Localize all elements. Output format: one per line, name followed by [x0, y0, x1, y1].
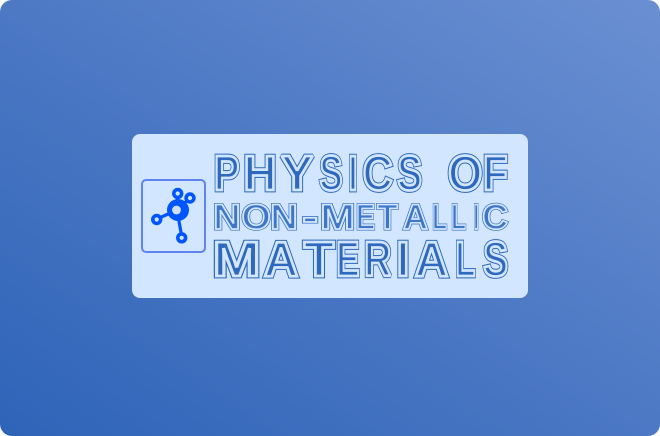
heading: PHYSICS OF: P: [214, 147, 239, 201]
heading: NON-METALLIC: T: [377, 198, 398, 237]
heading: MATERIALS: A: [415, 233, 448, 287]
heading: MATERIALS: M: [213, 233, 260, 287]
heading: MATERIALS: E: [336, 233, 360, 287]
heading: PHYSICS OF: S: [320, 147, 342, 201]
heading: NON-METALLIC: M: [320, 198, 355, 237]
heading: NON-METALLIC: I: [474, 198, 479, 237]
heading: PHYSICS OF: F: [483, 147, 508, 201]
heading: NON-METALLIC: E: [356, 198, 375, 237]
heading: NON-METALLIC: -: [302, 198, 318, 237]
heading: NON-METALLIC: M: [320, 198, 355, 237]
heading: PHYSICS OF: O: [448, 147, 482, 201]
icon: molecule in rounded box: [142, 180, 205, 252]
heading: MATERIALS: R: [364, 233, 391, 287]
heading: NON-METALLIC: L: [432, 198, 447, 237]
heading: MATERIALS: A: [264, 233, 298, 287]
heading: MATERIALS: I: [396, 233, 409, 287]
heading: NON-METALLIC: C: [482, 198, 508, 237]
heading: PHYSICS OF: C: [363, 147, 393, 201]
heading: NON-METALLIC: A: [403, 198, 428, 237]
heading: PHYSICS OF: P: [214, 147, 239, 201]
heading: MATERIALS: L: [456, 233, 475, 287]
heading: PHYSICS OF: C: [363, 147, 393, 201]
heading: NON-METALLIC: A: [403, 198, 428, 237]
heading: MATERIALS: L: [456, 233, 475, 287]
title card: [132, 134, 528, 298]
heading: MATERIALS: M: [213, 233, 260, 287]
heading: MATERIALS: [213, 233, 508, 287]
heading: PHYSICS OF: F: [483, 147, 508, 201]
heading: PHYSICS OF: Y: [281, 147, 314, 201]
heading: NON-METALLIC: E: [356, 198, 375, 237]
heading: PHYSICS OF: I: [348, 147, 357, 201]
heading: NON-METALLIC: O: [242, 198, 271, 237]
heading: NON-METALLIC: L: [451, 198, 466, 237]
heading: NON-METALLIC: -: [302, 198, 318, 237]
heading: NON-METALLIC: L: [451, 198, 466, 237]
heading: PHYSICS OF: H: [244, 147, 276, 201]
heading: NON-METALLIC: I: [474, 198, 479, 237]
heading: MATERIALS: S: [483, 233, 508, 287]
heading: NON-METALLIC: N: [270, 198, 298, 237]
heading: MATERIALS: S: [483, 233, 508, 287]
heading: PHYSICS OF: S: [320, 147, 342, 201]
heading: MATERIALS: E: [336, 233, 360, 287]
heading: NON-METALLIC: L: [432, 198, 447, 237]
heading: MATERIALS: T: [304, 233, 334, 287]
heading: NON-METALLIC: N: [213, 198, 241, 237]
heading: MATERIALS: T: [304, 233, 334, 287]
heading: PHYSICS OF: S: [397, 147, 422, 201]
heading: PHYSICS OF: H: [244, 147, 276, 201]
heading: NON-METALLIC: [213, 198, 508, 237]
heading: MATERIALS: A: [264, 233, 298, 287]
heading: MATERIALS: R: [364, 233, 391, 287]
heading: PHYSICS OF: O: [448, 147, 482, 201]
heading: NON-METALLIC: C: [482, 198, 508, 237]
heading: NON-METALLIC: T: [377, 198, 398, 237]
heading: NON-METALLIC: N: [213, 198, 241, 237]
heading: PHYSICS OF: Y: [281, 147, 314, 201]
heading: PHYSICS OF: I: [348, 147, 357, 201]
heading: MATERIALS: I: [396, 233, 409, 287]
heading: NON-METALLIC: O: [242, 198, 271, 237]
heading: NON-METALLIC: N: [270, 198, 298, 237]
heading: MATERIALS: A: [415, 233, 448, 287]
heading: PHYSICS OF: S: [397, 147, 422, 201]
heading: PHYSICS OF: [214, 147, 508, 201]
